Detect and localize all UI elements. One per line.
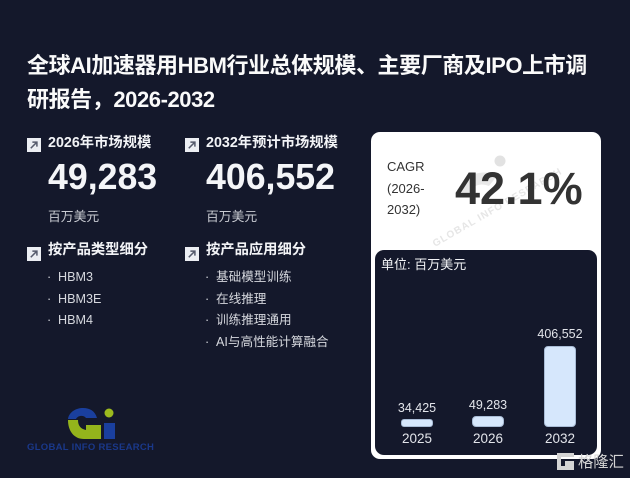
title: 研报告，2026-2032 xyxy=(27,87,215,112)
list: applications: 基础模型训练 xyxy=(216,270,292,284)
unit: million USD: 百万美元 xyxy=(48,209,99,224)
CAGR label xyxy=(387,159,425,217)
CAGR label: 2032) xyxy=(387,202,420,217)
bar shape 2026 xyxy=(472,416,504,427)
title xyxy=(27,53,587,112)
chart unit: 单位: 百万美元 xyxy=(381,257,466,272)
watermark: Gelonghui logo xyxy=(557,453,624,471)
CAGR label: (2026- xyxy=(387,180,425,196)
list: product types: HBM3 xyxy=(58,270,93,284)
value: 406,552: 406,552 xyxy=(206,157,335,197)
bar shape 2032 xyxy=(544,346,576,427)
list: product types: · xyxy=(47,292,51,306)
icon: arrow 2026 xyxy=(27,138,41,152)
label 49,283: 49,283 xyxy=(469,398,507,412)
CAGR value: 42.1% xyxy=(455,163,583,214)
list: product types xyxy=(47,270,101,327)
panel: 2026 market size xyxy=(27,134,157,224)
panel: by product application xyxy=(185,242,329,349)
list: product types: · xyxy=(47,270,51,284)
list: applications: · xyxy=(205,292,209,306)
year 2026: 2026 xyxy=(473,431,503,446)
list: applications: AI与高性能计算融合 xyxy=(216,335,329,349)
bar 2025 xyxy=(398,401,436,446)
heading: 2032 forecast market size: 2032年预计市场规模 xyxy=(206,135,338,151)
bar 2026 xyxy=(469,398,507,446)
label 406,552: 406,552 xyxy=(537,327,583,341)
list: product types: HBM3E xyxy=(58,292,101,306)
icon: arrow application xyxy=(185,247,199,261)
unit: million USD, 2032: 百万美元 xyxy=(206,209,257,224)
list: product types: HBM4 xyxy=(58,313,93,327)
icon: Gelonghui mark xyxy=(557,453,574,470)
list: applications: 在线推理 xyxy=(216,292,266,306)
logo text: GLOBAL INFO RESEARCH xyxy=(27,442,154,453)
list: applications: · xyxy=(205,270,209,284)
watermark: faint card logo: GLOBAL INFO RESEARCH xyxy=(431,166,564,250)
panel: by product type xyxy=(27,242,148,327)
heading: by product application: 按产品应用细分 xyxy=(206,242,306,258)
year 2025: 2025 xyxy=(402,431,432,446)
panel: bar chart xyxy=(375,250,597,455)
title: 全球AI加速器用HBM行业总体规模、主要厂商及IPO上市调 xyxy=(27,53,587,78)
year 2032: 2032 xyxy=(545,431,575,446)
list: applications: · xyxy=(205,313,209,327)
icon: arrow 2032 xyxy=(185,138,199,152)
value: 49,283: 49,283 xyxy=(48,157,157,197)
panel: 2032 forecast market size xyxy=(185,134,338,224)
list: product types: · xyxy=(47,313,51,327)
heading: 2026 market size: 2026年市场规模 xyxy=(48,135,151,151)
list: applications: 训练推理通用 xyxy=(216,313,292,327)
icon: arrow product type xyxy=(27,247,41,261)
list: applications: · xyxy=(205,335,209,349)
watermark text: 格隆汇 xyxy=(578,454,624,471)
list: applications xyxy=(205,270,329,349)
panel: CAGR and chart card xyxy=(371,132,601,459)
CAGR label: CAGR xyxy=(387,159,425,174)
heading: by product type: 按产品类型细分 xyxy=(48,242,148,258)
logo: Global Info Research xyxy=(27,408,154,453)
icon: Gi mark xyxy=(68,408,115,439)
bar shape 2025 xyxy=(401,419,433,427)
label 34,425: 34,425 xyxy=(398,401,436,415)
bar 2032 xyxy=(537,327,583,446)
